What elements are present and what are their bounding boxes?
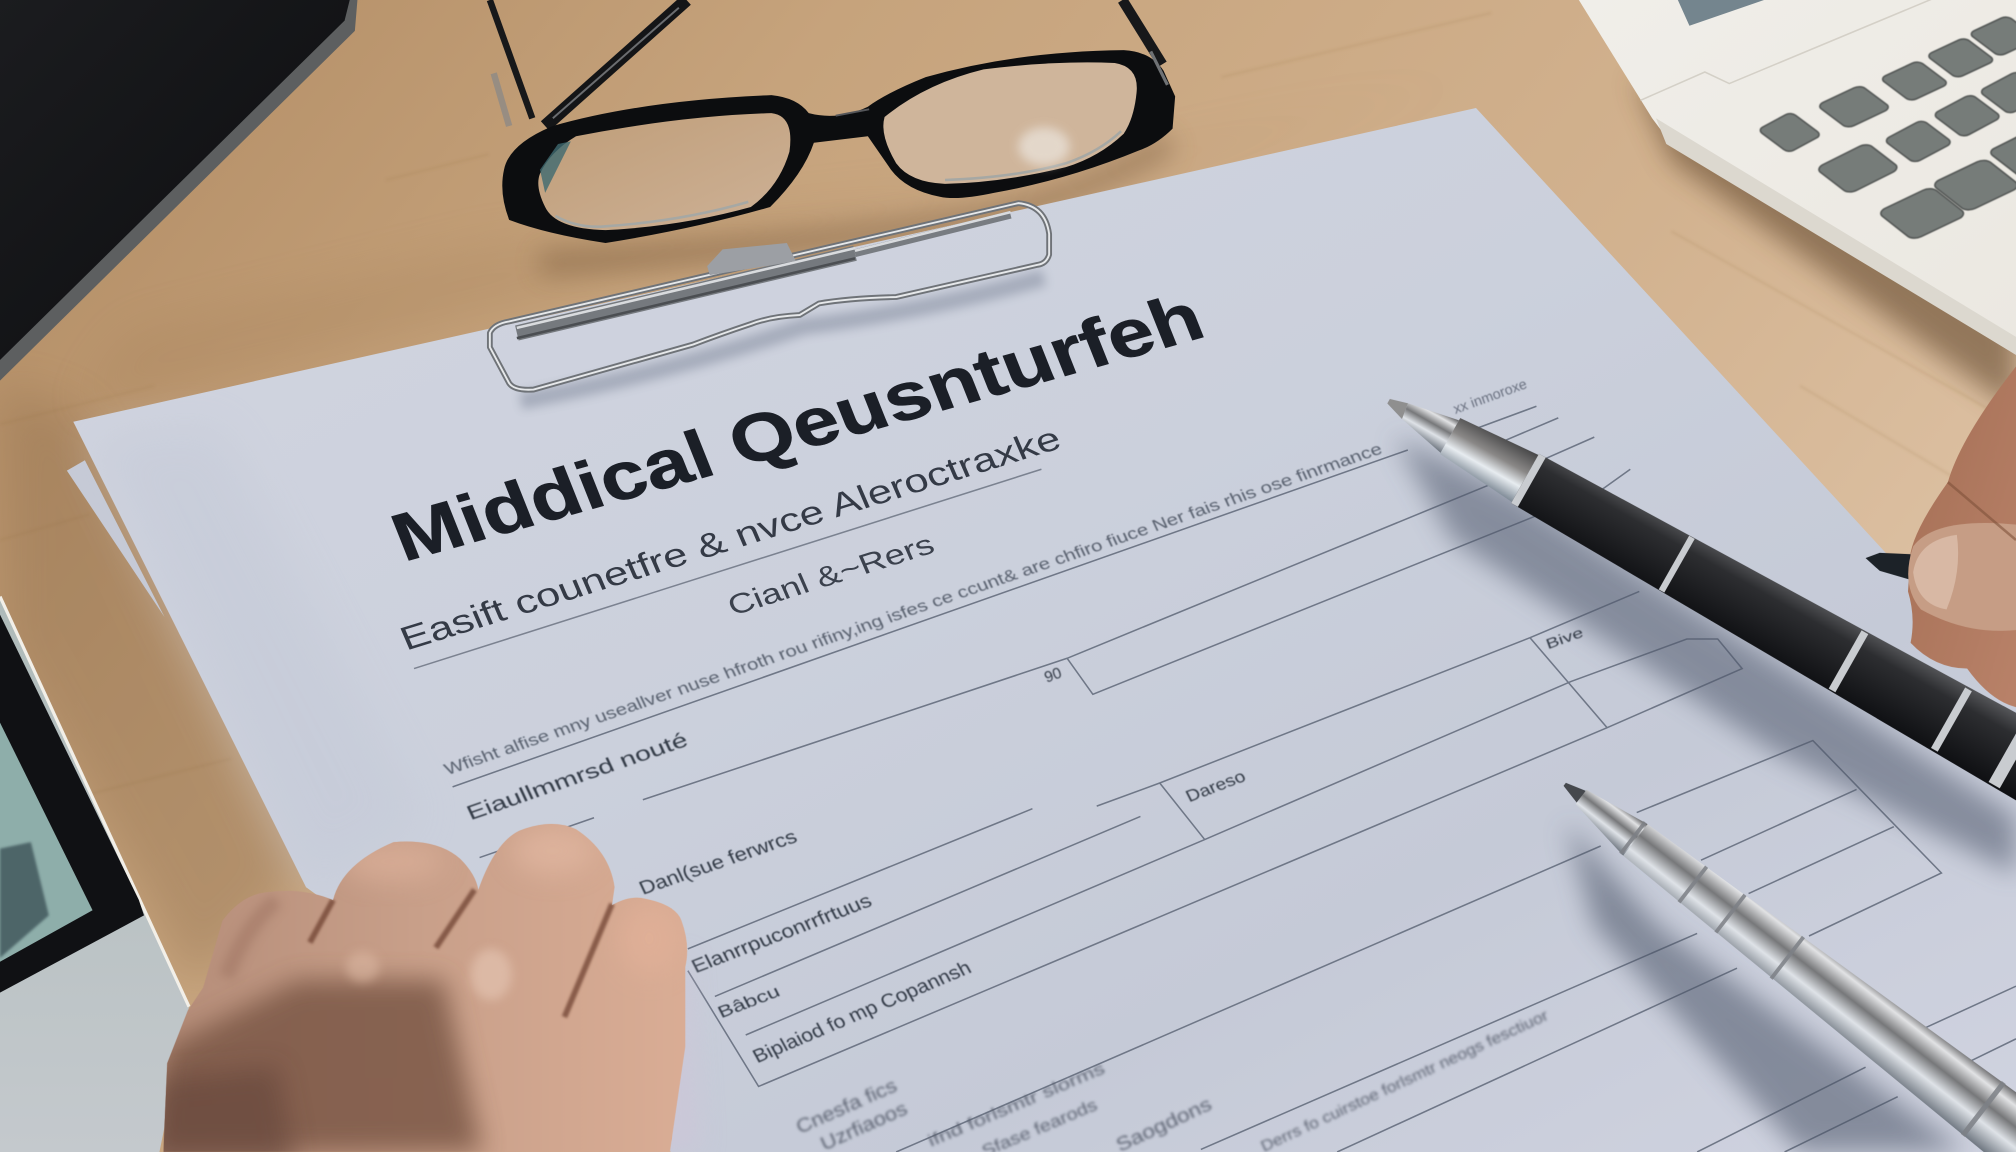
wire loop	[490, 203, 1049, 390]
field label: number: 90	[1042, 665, 1064, 686]
right hand with pen tip	[1866, 366, 2016, 707]
instruction text line: Wfisht alfise mny useallver nuse hfroth rou rifiny,ing isfes ce ccunt& are chfiro fiuce Ner fais rhis ose finrmance	[441, 440, 1385, 779]
field label: conditions: Elanrrpuconrrfrtuus	[688, 891, 875, 978]
clip clasp	[707, 243, 796, 275]
form ruled lines	[414, 406, 2016, 1152]
footer line three: ifnd forlsmtr slorms	[925, 1059, 1108, 1151]
temple arms	[490, 0, 1162, 126]
secondary heading: Cianl &~Rers	[723, 529, 939, 622]
clip rail	[517, 253, 855, 333]
right lens	[883, 62, 1137, 184]
silver ballpoint pen	[1543, 757, 2016, 1152]
field label: date: Dareso	[1182, 767, 1249, 806]
title: Middical Qeusnturfeh	[381, 279, 1214, 576]
clipboard wire clip	[490, 203, 1049, 401]
pen shadows	[1395, 437, 2016, 1152]
subtitle: Easift counetfre & nvce Aleroctraxke	[395, 420, 1067, 658]
frame	[502, 50, 1175, 243]
tablet top left	[0, 0, 357, 381]
blurred footer text	[793, 1007, 1551, 1152]
form field labels	[463, 375, 1585, 1068]
field label: blood: Bâbcu	[714, 982, 783, 1022]
device bottom left	[0, 597, 189, 1152]
laptop top right	[1579, 0, 2016, 411]
field label: box: Bive	[1544, 624, 1585, 652]
eyeglasses	[490, 0, 1175, 264]
black ballpoint pen	[1369, 366, 2016, 841]
left lens	[538, 113, 790, 230]
margin note top right: xx inmoroxe	[1451, 375, 1529, 417]
footer line one: Cnesfa fics	[793, 1075, 900, 1139]
field label: name: Eiaullmmrsd nouté	[463, 729, 692, 825]
field label: company: Biplaiod fo mp Copannsh	[750, 958, 975, 1068]
back of hand shadow	[154, 980, 482, 1152]
footer line five: Derrs fo cuirstoe forlsmtr neogs fesctiuor	[1258, 1007, 1551, 1152]
field label: features: Danl(sue ferwrcs	[636, 827, 801, 899]
laptop keyboard keys	[1758, 15, 2016, 240]
left hand	[141, 810, 707, 1152]
back sheet of paper	[67, 460, 165, 617]
